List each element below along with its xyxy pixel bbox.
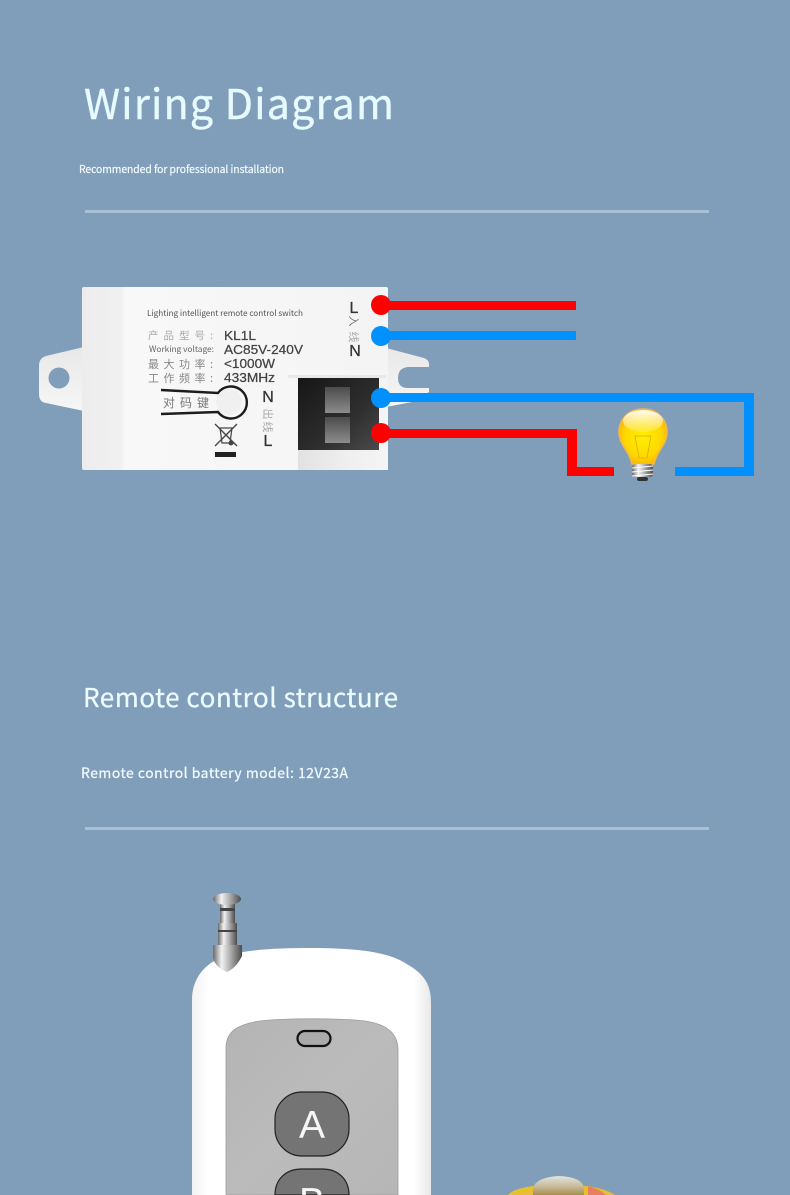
indicator light [298,1031,330,1046]
remote body [192,948,431,1195]
spec values: AC85V-240V [224,342,303,357]
button A [275,1092,349,1156]
input terminal letters: N [349,343,361,360]
button B [275,1169,349,1195]
wire: input neutral [371,326,576,346]
terminal block [288,375,386,450]
input terminal letters: L [350,300,359,317]
spec values: <1000W [224,357,275,371]
icon: light bulb [619,409,667,481]
input terminal letters: 入 [346,316,362,326]
terminal screw top [325,387,350,413]
input terminal letters: 线 [346,332,362,342]
module body [82,287,388,470]
heading: Remote control structure: Remote control structure [83,678,398,715]
wire: output neutral to bulb [371,388,754,476]
spec values [224,329,303,385]
input terminal letters [346,300,362,360]
antenna [213,893,242,972]
module label heading: Lighting intelligent remote control switch [147,307,303,319]
output terminal letters: N [262,389,274,406]
battery model note: Remote control battery model: 12V23A [81,763,349,783]
spec labels: Working voltage: [149,343,214,355]
wire: input live [371,295,576,315]
output terminal letters: 线 [260,422,276,432]
spec labels: 工作频率: [148,370,213,386]
switch module [39,287,429,470]
recycling symbol [215,424,237,457]
spec labels: 最大功率: [148,356,213,372]
terminal recess shadow [298,450,388,470]
button A: A [299,1104,325,1147]
output terminal letters: L [264,433,273,450]
remote grey panel [226,1019,398,1195]
remote control [192,893,431,1195]
output terminal letters: 出 [260,408,276,420]
left mounting ear [39,347,84,411]
spec values: 433MHz [224,371,275,385]
wire: output live to bulb [371,423,614,476]
battery [508,1176,615,1195]
subtitle: installation note: Recommended for professional installation [79,161,284,176]
spec values: KL1L [224,329,256,343]
spec labels: 产品型号: [148,328,213,343]
right mounting ear [386,348,429,407]
terminal screw bottom [325,417,350,443]
output terminal letters [260,389,276,450]
title: Wiring Diagram: Wiring Diagram [84,71,394,131]
pairing button [161,386,247,418]
spec labels [148,328,214,386]
pairing button: 对码键 [163,394,209,411]
